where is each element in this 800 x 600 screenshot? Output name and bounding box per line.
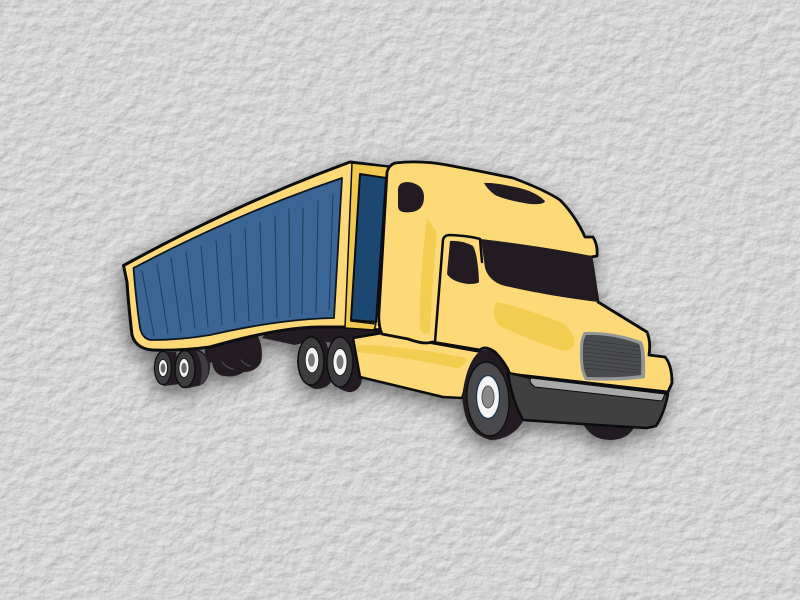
trailer side panel: blue: [134, 178, 342, 340]
drive wheels: [297, 335, 362, 392]
door window: [447, 241, 479, 284]
cab side crease highlight: [420, 218, 437, 334]
trailer frame: [124, 162, 390, 350]
sleeper window: [398, 182, 424, 212]
grille: [580, 332, 645, 381]
rear tandem wheels: [154, 349, 210, 388]
front bumper: [508, 373, 668, 428]
chassis lower body: [353, 333, 482, 398]
cab body: [379, 162, 672, 392]
hood highlight: [494, 302, 574, 350]
roof vent: [484, 183, 545, 204]
right front tyre: [583, 424, 635, 440]
windshield: [481, 239, 598, 302]
cab door seam: [435, 235, 482, 342]
rear suspension shadow block: [205, 336, 262, 376]
trailer ribs: [142, 194, 333, 336]
trailer front edge frame: [345, 163, 390, 330]
trailer front panel: dark blue: [351, 174, 386, 322]
trailer undercarriage: [262, 326, 395, 352]
truck: [124, 162, 672, 440]
front wheel: [462, 350, 524, 440]
